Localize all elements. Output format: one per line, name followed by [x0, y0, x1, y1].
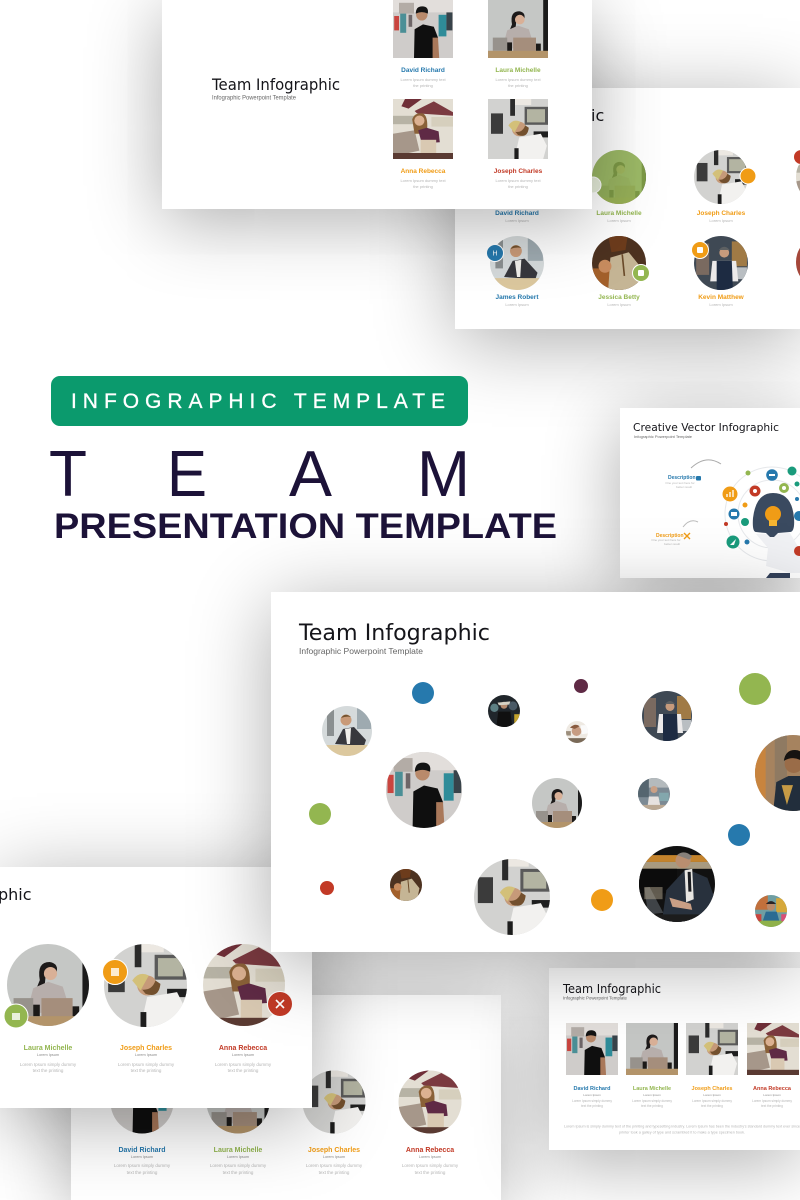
banner [51, 376, 468, 426]
member: Laura Michelle: Lorem Ipsum [37, 1053, 59, 1057]
card: David Richard: text the printing [581, 1104, 603, 1108]
card: David Richard [566, 1023, 618, 1108]
panel: team photo row slide (bottom right) [549, 968, 800, 1150]
slide title fragment: ic [591, 106, 604, 125]
headline [49, 437, 557, 546]
card: Anna Rebecca [393, 99, 453, 189]
headline: PRESENTATION TEMPLATE [54, 507, 557, 546]
card: Joseph Charles: Lorem Ipsum [703, 1093, 721, 1097]
card: Anna Rebecca: Lorem Ipsum dummy text [400, 178, 446, 183]
member: Laura Michelle: Laura Michelle [24, 1045, 72, 1052]
card: Laura Michelle: text the printing [641, 1104, 663, 1108]
member: David Richard [110, 1070, 174, 1175]
portrait: David Richard: Lorem Ipsum [505, 218, 529, 223]
card: Joseph Charles [686, 1023, 738, 1108]
description block: orange: Description [656, 533, 684, 539]
slide heading: Team Infographic [562, 981, 661, 996]
slide heading [211, 75, 340, 102]
card: Anna Rebecca: Lorem Ipsum simply dummy [752, 1099, 792, 1103]
colored dots [309, 673, 771, 911]
panel: main team bubble slide [271, 592, 800, 952]
card: Laura Michelle: Lorem Ipsum dummy text [495, 77, 541, 82]
portrait: James Robert: Lorem Ipsum [505, 302, 529, 307]
card: Anna Rebecca: Lorem Ipsum [763, 1093, 781, 1097]
card: David Richard: Lorem Ipsum simply dummy [572, 1099, 612, 1103]
portrait: Jessica Betty [592, 236, 650, 307]
member: David Richard: David Richard [118, 1147, 166, 1154]
slide heading: Infographic Powerpoint Template [563, 996, 627, 1000]
graphic: orbit rings [725, 467, 800, 561]
member: Joseph Charles: text the printing [319, 1170, 350, 1175]
member: Joseph Charles [102, 944, 187, 1073]
paragraph: printer took a galley of type and scrambled it to make a type specimen book. [619, 1130, 745, 1134]
member: Anna Rebecca: Anna Rebecca [219, 1045, 267, 1052]
card: Laura Michelle: Lorem Ipsum [643, 1093, 661, 1097]
portrait: Kevin Matthew: Lorem Ipsum [709, 302, 733, 307]
portrait: David Richard [490, 150, 544, 223]
headline: M [417, 437, 470, 510]
description block: blue: Description [668, 475, 696, 481]
member: Joseph Charles: text the printing [131, 1068, 162, 1073]
headline: T [49, 437, 87, 510]
slide heading: Infographic Powerpoint Template [212, 96, 297, 102]
portrait: Jessica Betty: Lorem Ipsum [607, 302, 631, 307]
member: David Richard: Lorem Ipsum simply dummy [114, 1163, 171, 1168]
card: Anna Rebecca: Anna Rebecca [401, 168, 446, 175]
card: Anna Rebecca: text the printing [761, 1104, 783, 1108]
portrait: Jessica Betty: Jessica Betty [598, 294, 640, 301]
member: Joseph Charles: Lorem Ipsum [135, 1053, 157, 1057]
member: Joseph Charles: Lorem Ipsum simply dummy [306, 1163, 363, 1168]
portrait: Joseph Charles: Joseph Charles [697, 210, 746, 217]
description block: blue: One your text here for [665, 481, 695, 485]
panel: three round portraits slide (bottom left) [0, 867, 312, 1108]
member: David Richard: Lorem Ipsum [131, 1155, 153, 1159]
banner label: INFOGRAPHIC TEMPLATE [71, 390, 445, 413]
description block: blue: better result [676, 485, 692, 489]
member: Anna Rebecca: Lorem Ipsum [232, 1053, 254, 1057]
headline: E [167, 437, 207, 510]
portrait: Laura Michelle: Lorem Ipsum [607, 218, 631, 223]
panel: creative vector infographic slide [620, 408, 800, 578]
hero: banner and headline [49, 376, 557, 546]
card: Laura Michelle [488, 0, 548, 88]
slide heading: Team Infographic [298, 621, 490, 646]
card: Joseph Charles: text the printing [701, 1104, 723, 1108]
description block: orange [651, 533, 690, 546]
slide heading: Team Infographic [211, 75, 340, 94]
description block: orange: One your text here for [651, 538, 681, 542]
card: Joseph Charles: Joseph Charles [494, 168, 543, 175]
card: David Richard: David Richard [401, 67, 445, 74]
portrait: James Robert: James Robert [496, 294, 539, 301]
card: Laura Michelle: the printing [508, 83, 528, 88]
card: Joseph Charles: Lorem Ipsum simply dummy [692, 1099, 732, 1103]
card: David Richard: David Richard [574, 1086, 610, 1092]
member: Anna Rebecca [398, 1070, 462, 1175]
portrait: James Robert: H [492, 250, 498, 258]
member: Laura Michelle: Laura Michelle [214, 1147, 262, 1154]
member: Anna Rebecca: Lorem Ipsum simply dummy [215, 1062, 272, 1067]
card: Joseph Charles: the printing [508, 184, 528, 189]
portrait: David Richard: David Richard [495, 210, 539, 217]
panel: four round portraits slide (bottom centre) [71, 995, 501, 1200]
paragraph: Lorem Ipsum is simply dummy text of the printing and typesetting industry. Lorem Ipsum has been the industry's standard dummy text ever since [564, 1124, 800, 1128]
panel: round portraits slide (upper right) [455, 88, 800, 329]
card: David Richard [393, 0, 453, 88]
description block: blue [665, 475, 701, 489]
arrow: lower curve [683, 521, 698, 527]
member: Laura Michelle: Lorem Ipsum simply dummy [210, 1163, 267, 1168]
arrow: upper curve [691, 460, 721, 468]
portrait: Joseph Charles [694, 150, 756, 223]
card: David Richard: the printing [413, 83, 433, 88]
portrait: cropped red tile [796, 235, 800, 289]
member: Anna Rebecca: Lorem Ipsum [419, 1155, 441, 1159]
member: Joseph Charles: Lorem Ipsum simply dummy [118, 1062, 175, 1067]
member: Anna Rebecca: text the printing [415, 1170, 446, 1175]
member: David Richard: text the printing [127, 1170, 158, 1175]
card: Laura Michelle: Lorem Ipsum simply dummy [632, 1099, 672, 1103]
card: Joseph Charles [488, 99, 548, 189]
description block: orange: better result [664, 542, 680, 546]
member: Laura Michelle: text the printing [33, 1068, 64, 1073]
card: Joseph Charles: Lorem Ipsum dummy text [495, 178, 541, 183]
bubble photos [322, 691, 800, 935]
portrait: Joseph Charles: Lorem Ipsum [709, 218, 733, 223]
member: Laura Michelle: Lorem Ipsum simply dummy [20, 1062, 77, 1067]
member: Anna Rebecca: Lorem Ipsum simply dummy [402, 1163, 459, 1168]
slide heading: Infographic Powerpoint Template [299, 646, 423, 656]
card: Laura Michelle: Laura Michelle [633, 1086, 671, 1092]
member: Joseph Charles [302, 1070, 366, 1175]
member: Joseph Charles: Joseph Charles [308, 1147, 360, 1154]
member: Joseph Charles: Lorem Ipsum [323, 1155, 345, 1159]
graphic: light bulb head [753, 493, 794, 537]
panel: square portraits slide (top) [162, 0, 592, 209]
member: Laura Michelle [206, 1070, 270, 1175]
portrait: Laura Michelle [585, 150, 646, 223]
portrait: Laura Michelle: Laura Michelle [596, 210, 642, 217]
slide heading: Creative Vector Infographic [633, 421, 779, 434]
graphic: hand and sleeve [756, 533, 800, 578]
portrait: Kevin Matthew [692, 236, 748, 307]
member: Anna Rebecca: Anna Rebecca [406, 1147, 454, 1154]
member: Laura Michelle: text the printing [223, 1170, 254, 1175]
card: Anna Rebecca [747, 1023, 799, 1108]
member: Joseph Charles: Joseph Charles [120, 1045, 172, 1052]
paragraph [564, 1124, 800, 1134]
headline: A [289, 437, 333, 510]
card: Anna Rebecca: the printing [413, 184, 433, 189]
slide heading: Infographic Powerpoint Template [634, 434, 693, 439]
member: Laura Michelle: Lorem Ipsum [227, 1155, 249, 1159]
card: Laura Michelle: Laura Michelle [495, 67, 541, 74]
member: Anna Rebecca [203, 944, 292, 1073]
card: David Richard: Lorem Ipsum dummy text [400, 77, 446, 82]
card: David Richard: Lorem Ipsum [583, 1093, 601, 1097]
graphic: orbit icons [722, 466, 800, 556]
portrait: cropped fourth column [794, 150, 800, 204]
member: Anna Rebecca: text the printing [228, 1068, 259, 1073]
portrait: Kevin Matthew: Kevin Matthew [698, 294, 745, 301]
portrait: James Robert [486, 236, 544, 307]
card: Anna Rebecca: Anna Rebecca [753, 1086, 792, 1092]
card: Joseph Charles: Joseph Charles [692, 1086, 732, 1092]
card: Laura Michelle [626, 1023, 678, 1108]
member: Laura Michelle [4, 944, 89, 1073]
